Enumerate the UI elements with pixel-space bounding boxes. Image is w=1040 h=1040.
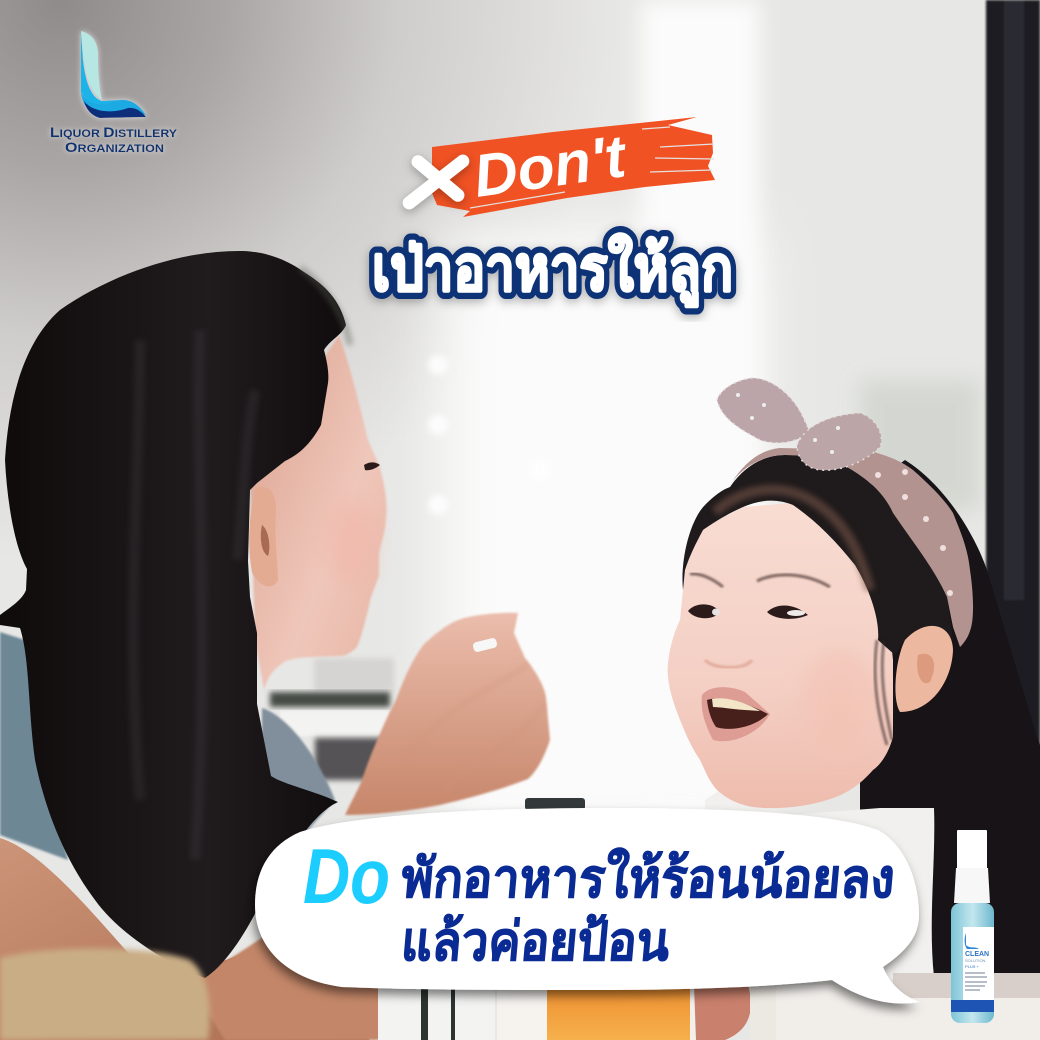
do word: Do [303, 832, 390, 920]
bottle label: CLEAN [965, 951, 989, 958]
bottle label: PLUS + [965, 964, 980, 969]
white cross mark [400, 152, 472, 212]
woman: eye [364, 462, 380, 470]
orange brush stroke [432, 117, 715, 217]
don't badge [400, 117, 715, 217]
woman: shirt [0, 632, 68, 860]
girl: nose [705, 660, 752, 668]
girl: face [668, 503, 893, 808]
girl: eyebrows [690, 574, 830, 587]
spoon [472, 637, 498, 653]
table items [378, 985, 1040, 1040]
woman: hand and forearm [345, 613, 550, 815]
headline: เป่าอาหารให้ลูก [372, 233, 733, 307]
girl: eyes [688, 604, 720, 618]
girl: long hair [850, 460, 1040, 975]
bottle label: SOLUTION [965, 958, 986, 963]
girl: mouth [702, 687, 770, 741]
woman: shoulder arm [0, 838, 370, 1040]
speech bubble [255, 808, 920, 1003]
advice text: พักอาหารให้ร้อนน้อยลง [399, 847, 897, 909]
girl: headband [732, 448, 973, 647]
woman feeding child [0, 251, 550, 1040]
girl: collar [700, 790, 934, 985]
wicker basket foreground [0, 948, 210, 1040]
bubble shape [255, 808, 920, 1003]
product bottle [951, 830, 994, 1023]
girl: ear [895, 626, 953, 712]
girl: hair on head [682, 455, 953, 655]
girl: table band [893, 973, 1040, 998]
speech bubble: แล้วค่อยป้อน [399, 912, 672, 972]
window frame on right [986, 0, 1040, 780]
bottle label [965, 933, 989, 990]
girl: bow [717, 378, 881, 470]
woman: hair [0, 251, 346, 978]
logo: Liquor Distillery Organization [50, 31, 178, 155]
woman: neck and face [250, 335, 387, 690]
headline: เป่าอาหารให้ลูก [372, 233, 733, 307]
woman: ear [249, 487, 278, 586]
logo mark L [81, 31, 146, 118]
don't word: Don't [469, 122, 632, 210]
logo: Liquor Distillery Organization: ORGANIZATION [65, 139, 164, 155]
logo text: LIQUOR DISTILLERY [50, 124, 178, 140]
girl [668, 378, 1040, 998]
